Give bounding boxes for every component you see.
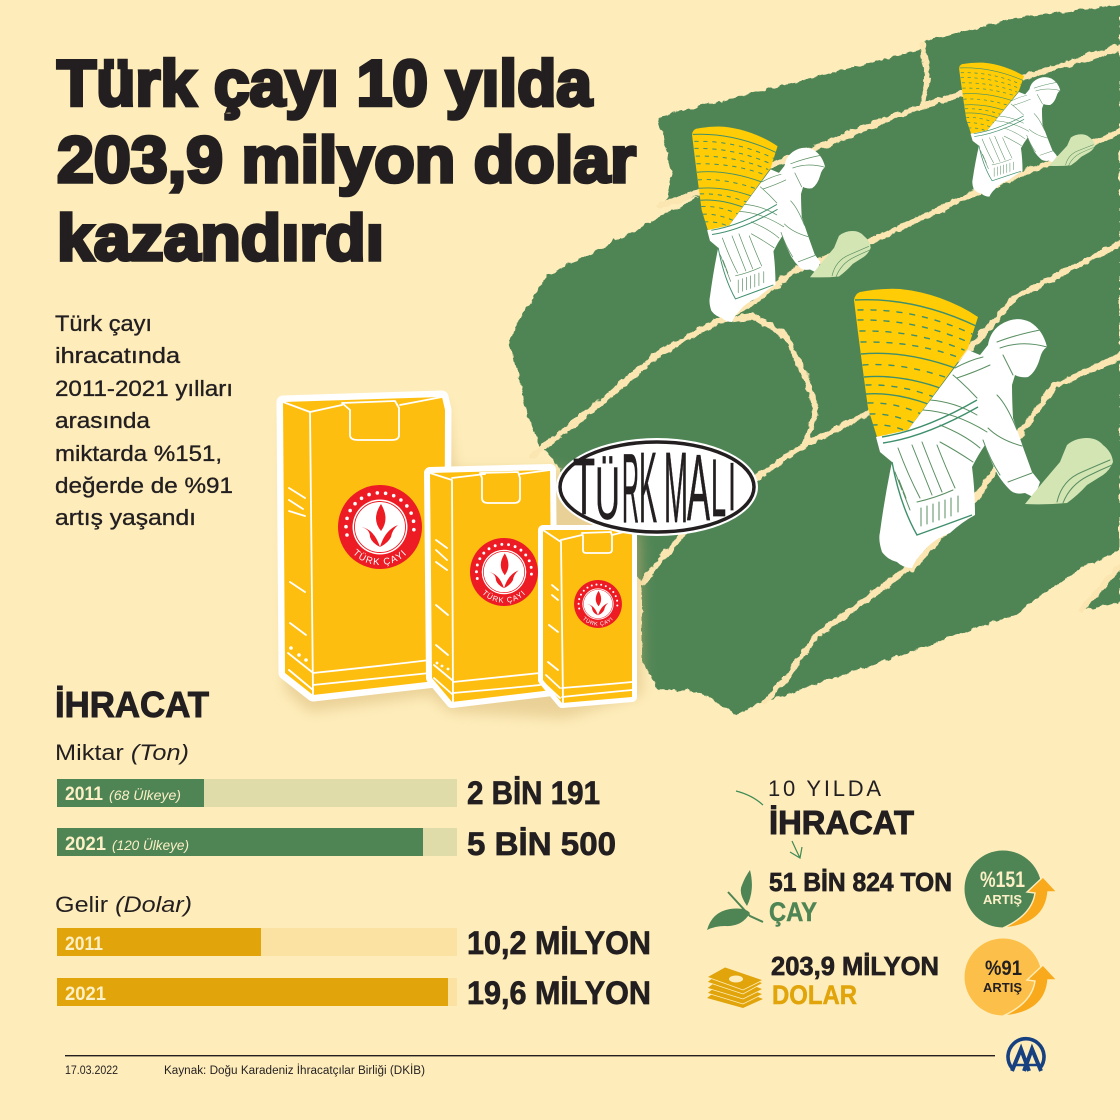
badge: medium [470,538,538,606]
badge: large: TÜRK ÇAYI [354,548,406,566]
footer date: 17.03.2022 [65,1065,118,1077]
illustration: green tea terraces [509,5,1120,716]
title [57,46,636,274]
bar: 2021 quantity: (120 Ülkeye) [112,836,189,853]
stat: 151 percent increase [964,850,1057,928]
icon: money stack [707,967,763,1008]
footer source: Kaynak: Doğu Karadeniz İhracatçılar Birliği (DKİB) [164,1064,425,1077]
heading: 10 yılda ihracat: İHRACAT [769,804,914,841]
value: 2011 revenue: 10,2 MİLYON [467,925,651,961]
value: 2021 quantity: 5 BİN 500 [467,826,616,862]
heading: 10 yılda ihracat: 10 YILDA [768,776,881,801]
stat: 91 percent increase: ARTIŞ [983,981,1022,995]
text: total dollars: 203,9 MİLYON [771,951,939,981]
intro text: arasında [55,408,151,433]
logo: Türk Malı: I [728,449,736,525]
footer rule [65,1055,995,1056]
title: 203,9 milyon dolar [57,123,636,196]
text: total tons [769,867,952,927]
text: total dollars [771,951,939,1010]
stat: 151 percent increase: %151 [980,867,1025,892]
badge: large [338,485,422,569]
logo: Türk Malı: K [639,432,657,544]
heading: 10 yılda ihracat [768,776,914,841]
intro text: artış yaşandı [55,505,196,530]
bar chart: revenue [57,925,651,1011]
intro text [55,311,233,530]
logo: AA [1008,1039,1044,1071]
small package [543,530,632,703]
subheading: Gelir: Gelir (Dolar) [55,892,192,917]
logo: Türk Malı: A [687,435,710,540]
intro text: Türk çayı [55,311,152,336]
intro text: miktarda %151, [55,441,222,466]
logo: Türk Malı: R [622,433,639,543]
text: total tons: 51 BİN 824 TON [769,867,952,897]
bar: 2011 quantity: 2011 [65,784,103,805]
bar: 2021 revenue: 2021 [65,984,106,1005]
bar: 2011 quantity: (68 Ülkeye) [109,786,181,803]
bar: 2021 revenue [57,978,457,1006]
icon: tea leaf [707,870,763,930]
subheading: Miktar: Miktar (Ton) [55,740,189,765]
bar: 2011 quantity [57,779,457,807]
stat: 91 percent increase: %91 [985,957,1022,980]
logo: Türk Malı: T [573,442,595,531]
title: Türk çayı 10 yılda [57,46,593,120]
logo: Türk Malı: M [664,432,688,544]
value: 2021 revenue: 19,6 MİLYON [467,975,651,1011]
value: 2011 quantity: 2 BİN 191 [467,775,600,811]
arrow: down [790,841,802,858]
intro text: 2011-2021 yılları [55,376,233,401]
large package [283,397,445,695]
stat: 91 percent increase [964,938,1057,1016]
illustration: tea picker, large [854,289,1113,568]
bar: 2021 quantity: 2021 [65,834,106,855]
logo: Türk Malı: Ü [595,452,620,535]
badge: medium: TÜRK ÇAYI [483,590,525,604]
badge: small: TÜRK ÇAYI [584,616,613,626]
bar: 2021 quantity [57,828,457,856]
intro text: değerde de %91 [55,473,233,498]
title: kazandırdı [57,201,384,274]
intro text: ihracatında [55,343,181,368]
logo: Türk Malı [556,432,758,544]
logo: Türk Malı: L [711,443,726,534]
badge: small [574,580,622,628]
illustration: tea picker, top [959,63,1095,197]
bar: 2011 revenue: 2011 [65,934,103,955]
illustration: tea packages [276,390,650,723]
heading: İhracat: İHRACAT [55,684,209,725]
text: total dollars: DOLAR [772,980,857,1010]
illustration: tea picker, middle [692,127,871,322]
medium package [430,470,552,702]
bar chart: quantity [57,775,616,862]
arrow: curved line [736,791,763,805]
stat: 151 percent increase: ARTIŞ [983,893,1022,907]
text: total tons: ÇAY [769,897,817,927]
bar: 2011 revenue [57,928,457,956]
